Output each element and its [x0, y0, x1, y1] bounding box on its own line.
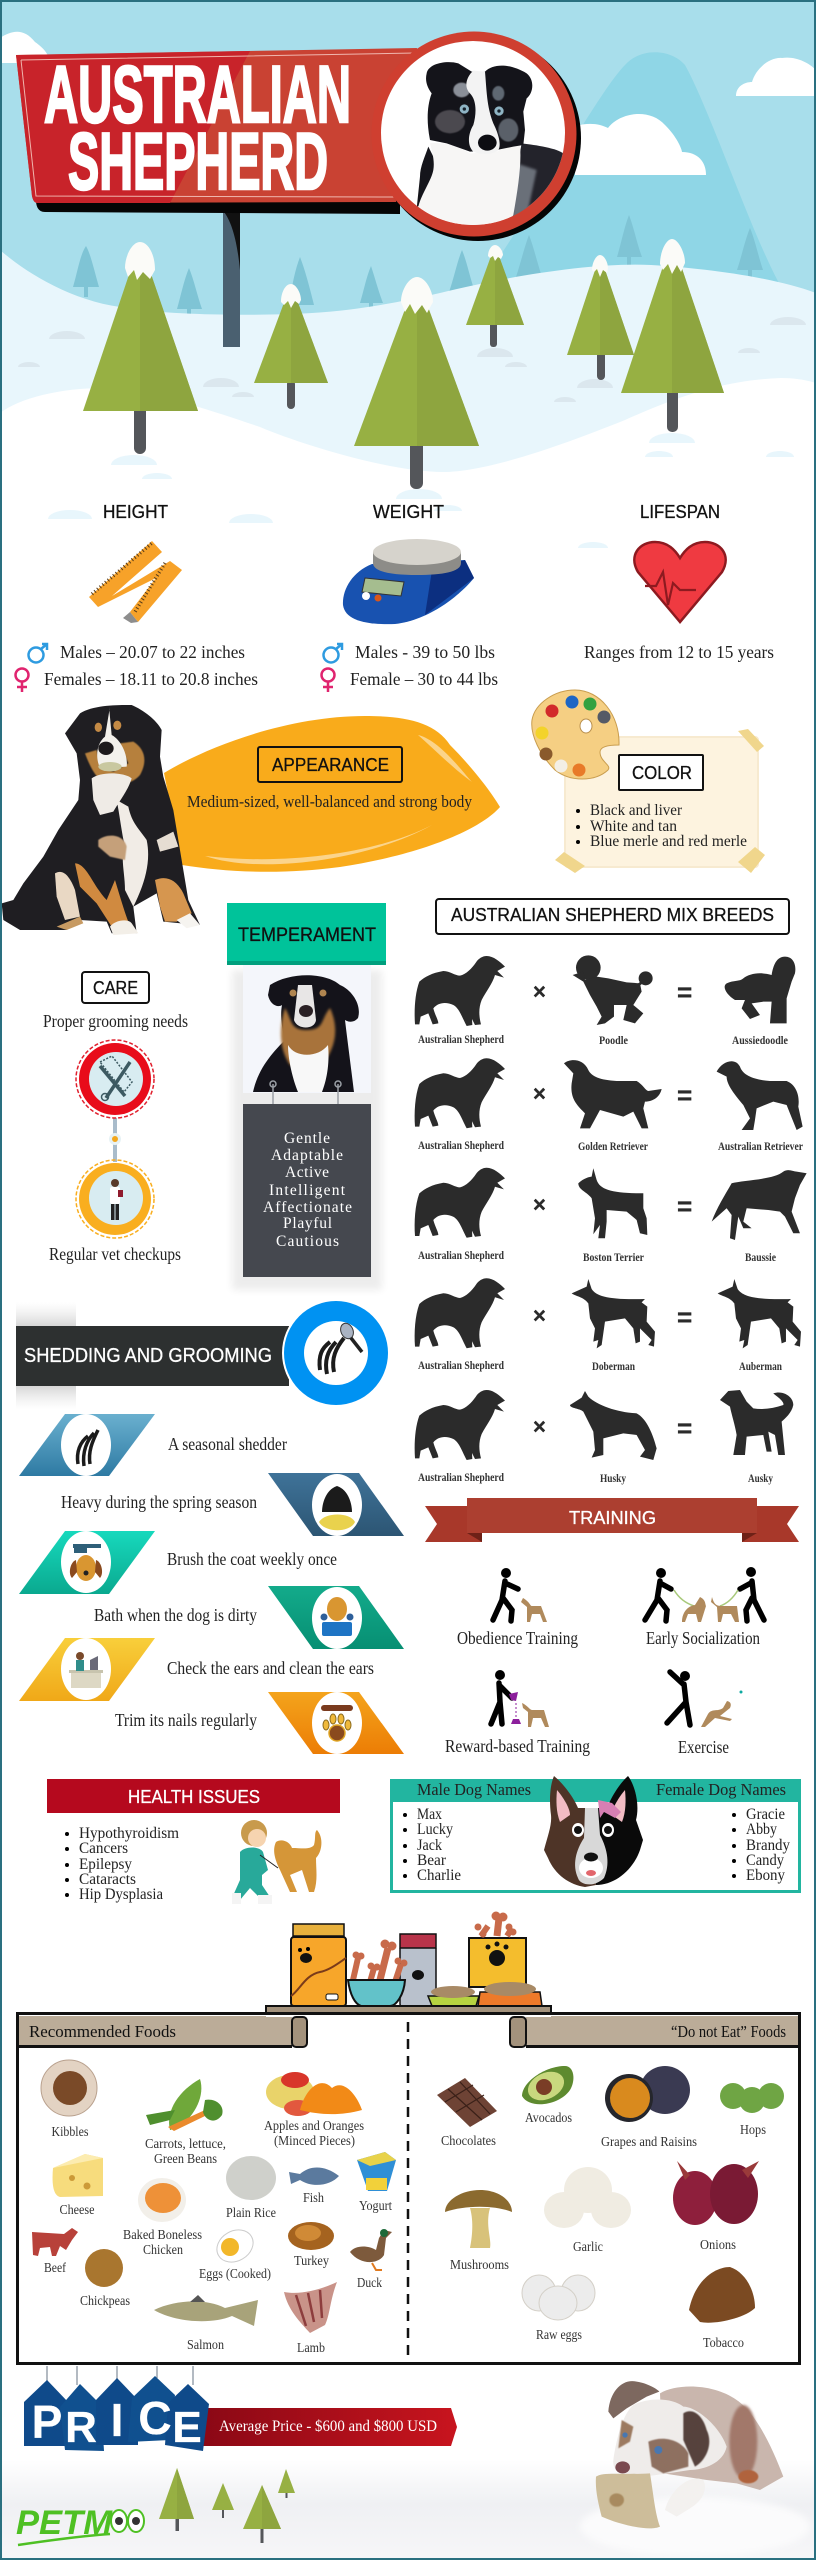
panel: care [43, 972, 188, 1264]
foreground pine trees [83, 239, 724, 489]
reward-based training [445, 1670, 590, 1756]
avoid: hops: Hops [740, 2123, 766, 2138]
panel: training [425, 1498, 799, 1757]
icon: male [28, 644, 47, 662]
row: auberman: Auberman [739, 1359, 782, 1373]
avoid: garlic [544, 2167, 631, 2255]
list of conditions: Epilepsy [79, 1856, 132, 1873]
row: australian retriever: Golden Retriever [578, 1139, 649, 1153]
list of conditions [65, 1825, 179, 1903]
recommended: beef [32, 2228, 78, 2276]
panel: appearance [164, 716, 500, 872]
training ribbon: TRAINING [569, 1507, 656, 1528]
row: baussie: Baussie [745, 1250, 777, 1264]
row: ausky: Ausky [748, 1471, 773, 1485]
list of conditions: Hip Dysplasia [79, 1886, 163, 1903]
shedding heading [16, 1302, 289, 1410]
price banner [200, 2408, 457, 2446]
shelf brackets [292, 2017, 526, 2047]
price tags: R [65, 2403, 97, 2452]
panel: care: CARE [93, 977, 138, 998]
title sign [16, 32, 581, 241]
illustration: dog food shelf [266, 1912, 551, 2017]
female names: Gracie [746, 1806, 785, 1823]
row: aussiedoodle: Poodle [599, 1033, 629, 1047]
avoid: tobacco [689, 2267, 755, 2351]
recommended: beef: Beef [44, 2261, 66, 2276]
icon: kitchen scale [343, 539, 474, 624]
orange bowl [478, 1982, 542, 2006]
tip: brush: Brush the coat weekly once [167, 1549, 337, 1569]
row: ausky: = [677, 1413, 692, 1443]
tip: seasonal shedder: A seasonal shedder [168, 1434, 287, 1454]
price banner: Average Price - $600 and $800 USD [219, 2418, 437, 2435]
recommended: apples and oranges: Apples and Oranges [264, 2119, 364, 2134]
color label: COLOR [632, 762, 692, 783]
icon: vet [76, 1160, 154, 1238]
yellow box [469, 1912, 526, 1987]
stat: height: Males – 20.07 to 22 inches [60, 642, 245, 662]
trait list: Intelligent [269, 1182, 346, 1199]
panel: dog names [390, 1776, 801, 1892]
row: australian retriever: = [677, 1080, 692, 1110]
row: aussiedoodle: × [533, 979, 546, 1004]
row: auberman: Doberman [592, 1359, 635, 1373]
orange leaf shape [164, 716, 500, 872]
icon: male [324, 644, 342, 662]
recommended: turkey [288, 2222, 334, 2269]
row: baussie: Boston Terrier [583, 1250, 645, 1264]
tip: ears [19, 1638, 374, 1701]
avoid: mushrooms: Mushrooms [450, 2258, 509, 2273]
recommended: chicken: Chicken [143, 2243, 183, 2258]
price tags [24, 2366, 209, 2452]
panel: care: Proper grooming needs [43, 1011, 188, 1031]
avoid: grapes and raisins [601, 2066, 697, 2150]
row: ausky: Husky [600, 1471, 626, 1485]
male names: Jack [417, 1837, 442, 1854]
color list [576, 802, 747, 850]
dog portrait [417, 62, 565, 230]
dog photo [243, 965, 371, 1093]
price tags: I [111, 2394, 123, 2446]
hanger strings [270, 1081, 341, 1113]
appearance label [258, 747, 402, 782]
small bowl [428, 1986, 479, 2006]
recommended: plain rice [226, 2156, 276, 2221]
avoid: garlic: Garlic [573, 2240, 603, 2255]
title sign: SHEPHERD [68, 117, 328, 207]
icon: paint palette [532, 690, 619, 779]
background pine trees [73, 215, 763, 320]
stat: weight: Males - 39 to 50 lbs [355, 642, 495, 662]
trait list: Affectionate [263, 1199, 352, 1216]
note paper [555, 729, 765, 873]
male names: Lucky [417, 1821, 453, 1838]
female names [732, 1806, 790, 1884]
stat: height: Females – 18.11 to 20.8 inches [44, 669, 258, 689]
tip: nails [115, 1692, 404, 1754]
sign pole [223, 205, 240, 347]
recommended: fish: Fish [303, 2191, 324, 2206]
male names [403, 1806, 461, 1884]
color list: Black and liver [590, 802, 683, 819]
early socialization [645, 1567, 764, 1648]
row: baussie: × [533, 1192, 546, 1217]
stat: weight: WEIGHT [373, 501, 444, 522]
panel: color [532, 690, 765, 873]
connector [109, 1118, 121, 1162]
recommended: plain rice: Plain Rice [226, 2206, 276, 2221]
panel: care: Regular vet checkups [49, 1244, 181, 1264]
stat: lifespan: Ranges from 12 to 15 years [584, 642, 774, 662]
female names: Ebony [746, 1867, 785, 1884]
recommended: vegetables: Carrots, lettuce, [145, 2137, 226, 2152]
recommended: duck [350, 2229, 392, 2291]
recommended: apples and oranges: (Minced Pieces) [274, 2134, 355, 2149]
icon: brush and hair [282, 1299, 390, 1407]
recommended: chickpeas: Chickpeas [80, 2294, 130, 2309]
panel: health issues [47, 1779, 340, 1904]
tip: bath: Bath when the dog is dirty [94, 1605, 257, 1625]
row: australian retriever [415, 1058, 804, 1153]
reward-based training: Reward-based Training [445, 1736, 590, 1756]
avoid: grapes and raisins: Grapes and Raisins [601, 2135, 697, 2150]
cloud: top left [0, 32, 50, 63]
tip: nails: Trim its nails regularly [115, 1710, 257, 1730]
illustration: vet and dog [232, 1820, 321, 1904]
exercise: Exercise [678, 1737, 729, 1757]
recommended: salmon [154, 2295, 258, 2353]
mix breeds heading: AUSTRALIAN SHEPHERD MIX BREEDS [451, 904, 774, 925]
training ribbon [425, 1498, 799, 1542]
temperament header [227, 903, 386, 965]
avoid: chocolates: Chocolates [441, 2134, 496, 2149]
row: baussie: Australian Shepherd [418, 1248, 504, 1262]
row: baussie [415, 1168, 807, 1264]
recommended: chicken [123, 2178, 202, 2258]
row: aussiedoodle: Aussiedoodle [732, 1033, 789, 1047]
trait list: Gentle [284, 1130, 330, 1147]
recommended: chickpeas [80, 2249, 130, 2309]
recommended: vegetables: Green Beans [154, 2152, 217, 2167]
recommended: lamb: Lamb [297, 2341, 325, 2356]
tip: ears: Check the ears and clean the ears [167, 1658, 374, 1678]
tip: spring [61, 1473, 404, 1536]
recommended: fish [289, 2167, 339, 2206]
stat: lifespan: LIFESPAN [640, 501, 720, 522]
trait list: Adaptable [271, 1147, 343, 1164]
recommended: chicken: Baked Boneless [123, 2228, 202, 2243]
avoid: mushrooms [445, 2190, 512, 2273]
row: auberman: = [677, 1302, 692, 1332]
appearance label: APPEARANCE [272, 754, 389, 775]
health heading: HEALTH ISSUES [128, 1786, 260, 1807]
snow footer [2, 2381, 814, 2558]
panel: price [24, 2366, 457, 2452]
avoid: onions: Onions [700, 2238, 736, 2253]
tan header [19, 2016, 798, 2046]
panel: temperament [227, 903, 386, 1290]
row: ausky [415, 1390, 793, 1485]
avoid: chocolates [437, 2078, 497, 2149]
row: australian retriever: Australian Shepherd [418, 1138, 504, 1152]
color label [619, 755, 703, 790]
title text: AUSTRALIAN [44, 50, 351, 140]
obedience training [457, 1568, 578, 1648]
panel: foods: “Do not Eat” Foods [671, 2022, 786, 2041]
avoid: raw eggs: Raw eggs [536, 2328, 582, 2343]
avoid: tobacco: Tobacco [703, 2336, 744, 2351]
panel: dog names: Male Dog Names [417, 1780, 531, 1799]
avoid: hops [720, 2083, 784, 2138]
row: aussiedoodle: Australian Shepherd [418, 1032, 504, 1046]
cloud: top right [736, 58, 816, 96]
stat: weight: Female – 30 to 44 lbs [350, 669, 498, 689]
footer pine trees [159, 2468, 295, 2543]
shedding heading: SHEDDING AND GROOMING [24, 1345, 272, 1367]
snow hill, near [0, 378, 816, 560]
logo: PETM [16, 2504, 113, 2542]
female names: Abby [746, 1821, 777, 1838]
recommended: cheese [53, 2154, 103, 2218]
winter landscape header [0, 0, 816, 560]
male names: Bear [417, 1852, 447, 1869]
price tags: E [172, 2403, 202, 2452]
price tags: P [32, 2396, 62, 2448]
trait list: Active [285, 1164, 329, 1181]
trait list: Playful [283, 1215, 332, 1232]
snow mounds [18, 317, 806, 402]
icon: comb and scissors [76, 1040, 154, 1118]
color list: Blue merle and red merle [590, 833, 747, 850]
list of conditions: Cancers [79, 1840, 128, 1857]
tip: bath [94, 1586, 404, 1649]
stat: height [16, 501, 258, 692]
list of conditions: Cataracts [79, 1871, 136, 1888]
male names: Charlie [417, 1867, 461, 1884]
recommended: vegetables [145, 2079, 226, 2167]
panel: shedding and grooming [16, 1299, 404, 1754]
tip: spring: Heavy during the spring season [61, 1492, 257, 1512]
illustration: dog face [544, 1776, 643, 1887]
avoid: avocados [522, 2066, 573, 2126]
recommended: lamb [284, 2282, 337, 2356]
recommended: kibbles: Kibbles [52, 2125, 88, 2140]
cloud: centre [575, 114, 706, 175]
recommended: turkey: Turkey [294, 2254, 329, 2269]
color list: White and tan [590, 818, 677, 835]
recommended: yogurt: Yogurt [359, 2199, 392, 2214]
recommended: cheese: Cheese [60, 2203, 94, 2218]
panel: appearance: Medium-sized, well-balanced and strong body [187, 792, 473, 811]
recommended: kibbles [41, 2060, 97, 2140]
row: auberman: Australian Shepherd [418, 1358, 504, 1372]
obedience training: Obedience Training [457, 1628, 578, 1648]
stat: weight [322, 501, 498, 692]
snow hill, far [0, 250, 816, 480]
recommended: eggs: Eggs (Cooked) [199, 2267, 271, 2282]
panel: foods [16, 2014, 801, 2364]
row: auberman: × [533, 1303, 546, 1328]
icon: female [16, 668, 28, 692]
row: baussie: = [677, 1191, 692, 1221]
male names: Max [417, 1806, 442, 1823]
temperament header: TEMPERAMENT [238, 924, 376, 946]
panel: dog names: Female Dog Names [656, 1780, 786, 1799]
trait list: Cautious [276, 1233, 339, 1250]
recommended: salmon: Salmon [187, 2338, 224, 2353]
icon: tape measure [89, 541, 182, 623]
row: auberman [415, 1278, 801, 1373]
exercise [667, 1671, 742, 1757]
bowl [348, 1980, 405, 2006]
avoid: avocados: Avocados [525, 2111, 572, 2126]
stat: lifespan [584, 501, 774, 662]
illustration: tricolour dog sitting [2, 705, 200, 935]
row: australian retriever: × [533, 1081, 546, 1106]
row: ausky: × [533, 1414, 546, 1439]
mountain [480, 52, 780, 285]
recommended: eggs [199, 2224, 271, 2282]
list of conditions: Hypothyroidism [79, 1825, 179, 1842]
logo [16, 2504, 144, 2545]
female names: Brandy [746, 1837, 790, 1854]
food bag [291, 1924, 346, 2006]
recommended: apples and oranges [264, 2072, 364, 2149]
bones [352, 1940, 408, 1982]
panel: mix breeds [415, 899, 807, 1485]
recommended: yogurt [357, 2152, 396, 2214]
trait list [243, 1104, 371, 1277]
icon: heart with pulse [634, 542, 726, 622]
avoid: raw eggs [522, 2275, 595, 2343]
early socialization: Early Socialization [646, 1628, 760, 1648]
stat: height: HEIGHT [103, 501, 168, 522]
price tags: C [138, 2392, 172, 2444]
can [400, 1934, 436, 2006]
health heading [47, 1779, 340, 1813]
avoid: onions [673, 2161, 759, 2253]
icon: female [322, 668, 334, 692]
mix breeds heading [436, 899, 789, 934]
tip: brush [19, 1531, 337, 1594]
tip: seasonal shedder [19, 1414, 287, 1476]
panel: foods: Recommended Foods [29, 2022, 176, 2041]
female names: Candy [746, 1852, 784, 1869]
recommended: duck: Duck [357, 2276, 382, 2291]
row: ausky: Australian Shepherd [418, 1470, 504, 1484]
illustration: puppy with bone [580, 2381, 810, 2557]
row: aussiedoodle [415, 955, 795, 1047]
row: aussiedoodle: = [677, 977, 692, 1007]
